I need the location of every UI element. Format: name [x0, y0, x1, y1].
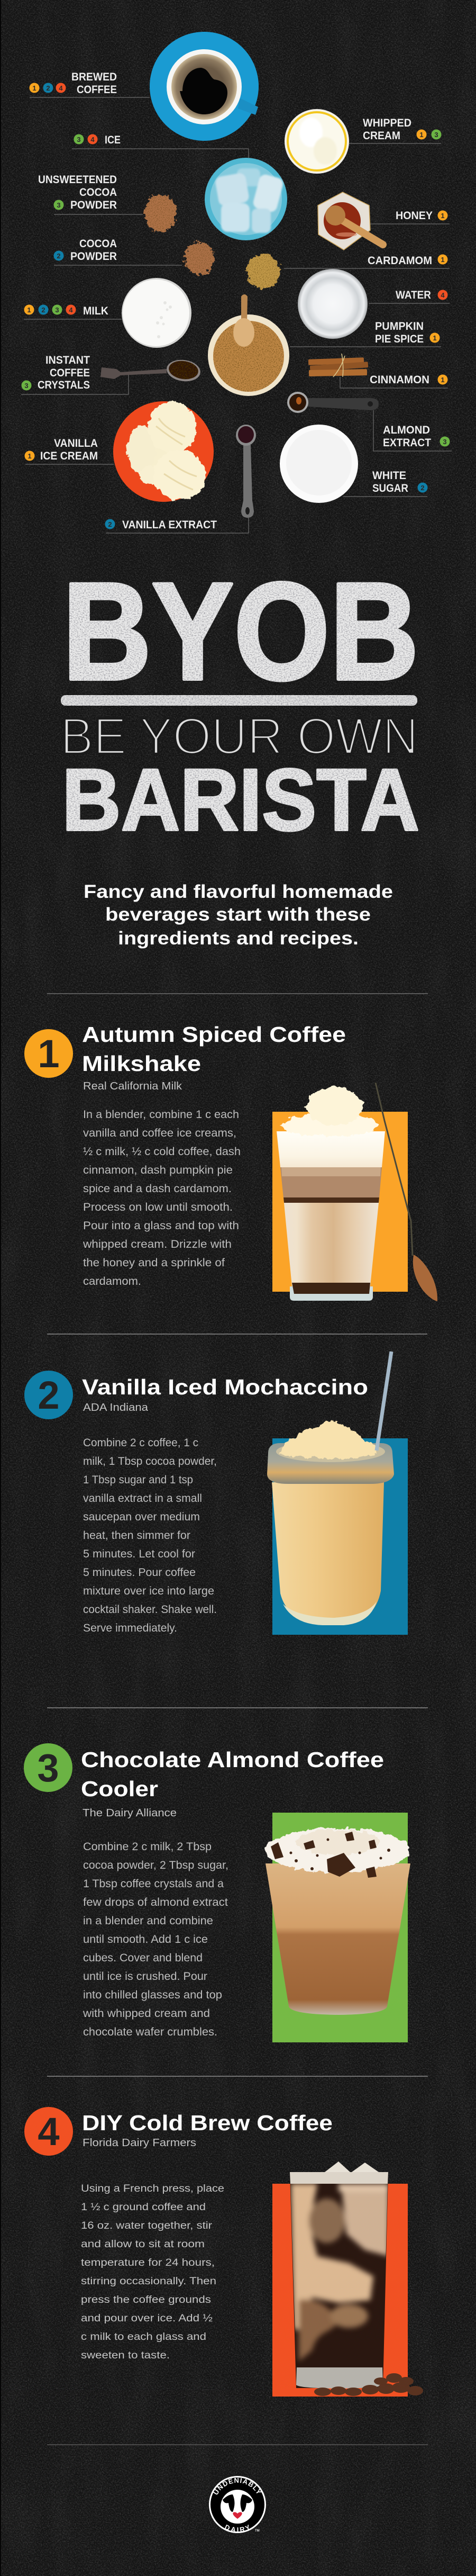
number badge 2: 2	[38, 1373, 60, 1417]
recipe 3 heading	[81, 1748, 384, 1801]
label: milk: 3	[55, 306, 59, 314]
label: water: 4	[441, 291, 445, 299]
ingredient: ice bowl	[205, 158, 287, 240]
label: white sugar	[343, 470, 427, 497]
label: pumpkin pie spice: PIE SPICE	[375, 333, 424, 345]
label: cocoa powder: 2	[57, 252, 61, 260]
recipe 4: DIY Cold Brew Coffee	[24, 2107, 423, 2397]
recipe 2 instructions: vanilla extract in a small	[83, 1492, 202, 1505]
recipe 1 instructions: vanilla and coffee ice creams,	[83, 1127, 236, 1139]
recipe 3 instructions: until smooth. Add 1 c ice	[83, 1933, 208, 1945]
ingredient: water bowl	[298, 269, 368, 339]
label: pumpkin pie spice	[290, 320, 441, 347]
recipe 3 source: The Dairy Alliance	[83, 1807, 177, 1819]
label: cardamom: 1	[441, 256, 445, 264]
recipe 3 instructions: cocoa powder, 2 Tbsp sugar,	[83, 1859, 228, 1871]
recipe 2 photo: mason jar on blue panel with straw	[267, 1352, 408, 1635]
label: cinnamon: CINNAMON	[370, 374, 429, 386]
recipe 4 instructions: stirring occasionally. Then	[81, 2276, 216, 2287]
recipe 3 photo: iced coffee glass on green panel	[266, 1813, 410, 2042]
recipe 4 photo: cold brew glass on red panel with coffee beans	[272, 2161, 423, 2397]
label: cinnamon	[340, 374, 448, 388]
ingredient: whipped cream bowl	[285, 109, 349, 174]
recipe 3 instructions: cubes. Cover and blend	[83, 1952, 203, 1964]
recipe 1 instructions: cinnamon, dash pumpkin pie	[83, 1164, 233, 1176]
recipe 1 instructions: ½ c milk, ½ c cold coffee, dash	[83, 1146, 241, 1158]
label: white sugar: 2	[420, 484, 425, 492]
label: instant coffee crystals: CRYSTALS	[38, 379, 90, 391]
ingredient: honey jar with dipper	[318, 192, 383, 250]
label: vanilla extract	[105, 518, 249, 533]
ingredient: brewed coffee cup	[150, 32, 259, 141]
recipe 1 heading	[82, 1022, 346, 1076]
label: ice: 3	[77, 136, 81, 143]
label: cocoa powder: COCOA	[79, 238, 117, 250]
label: brewed coffee: COFFEE	[77, 84, 117, 96]
logo: Undeniably Dairy: UNDENIABLY	[213, 2478, 261, 2494]
recipe 1: Autumn Spiced Coffee Milkshake	[24, 1022, 437, 1301]
label: brewed coffee: 4	[59, 84, 63, 92]
label: unsweetened cocoa powder: UNSWEETENED	[38, 174, 117, 186]
intro text: ingredients and recipes.	[118, 928, 359, 949]
recipe 1 source: Real California Milk	[83, 1080, 182, 1092]
number badge 4	[24, 2107, 73, 2156]
recipe 2 source: ADA Indiana	[83, 1402, 149, 1413]
recipe 4 instructions	[81, 2183, 224, 2361]
title: BYOB Be Your Own Barista: BYOB	[62, 554, 419, 709]
recipe 3 instructions: into chilled glasses and top	[83, 1989, 222, 2001]
recipe 4 instructions: and pour over ice. Add ½	[81, 2313, 213, 2324]
recipe 3 instructions: with whipped cream and	[83, 2007, 210, 2020]
recipe 3 instructions: 1 Tbsp coffee crystals and a	[83, 1878, 224, 1890]
ingredient: vanilla ice cream plate	[113, 401, 214, 502]
label: almond extract: 3	[443, 438, 447, 446]
label: unsweetened cocoa powder: 3	[57, 201, 61, 209]
ingredient: cinnamon sticks	[308, 354, 368, 377]
label: instant coffee crystals	[21, 354, 129, 394]
label: ice: 4	[90, 136, 95, 143]
recipe 2 instructions: saucepan over medium	[83, 1511, 200, 1523]
label: honey	[370, 210, 450, 224]
label: instant coffee crystals: INSTANT	[45, 354, 90, 366]
recipe 4 source: Florida Dairy Farmers	[83, 2137, 196, 2149]
label: whipped cream: 1	[419, 131, 424, 139]
label: cocoa powder: POWDER	[70, 250, 117, 263]
recipe 1 heading: Autumn Spiced Coffee	[82, 1022, 346, 1047]
recipe 2 heading: Vanilla Iced Mochaccino	[82, 1375, 368, 1399]
recipe 4 instructions: and allow to sit at room	[81, 2239, 205, 2250]
recipe 1 instructions: Pour into a glass and top with	[83, 1220, 239, 1232]
number badge 1: 1	[38, 1032, 60, 1076]
label: milk: 1	[27, 306, 31, 314]
recipe 3 instructions: Combine 2 c milk, 2 Tbsp	[83, 1841, 212, 1853]
label: whipped cream	[349, 117, 441, 143]
recipe 2 instructions: Serve immediately.	[83, 1622, 177, 1634]
recipe 1 instructions: whipped cream. Drizzle with	[83, 1238, 232, 1250]
label: whipped cream: 3	[434, 131, 438, 139]
label: pumpkin pie spice: PUMPKIN	[375, 320, 424, 332]
intro text: beverages start with these	[105, 904, 371, 925]
ingredient: cocoa powder pile	[185, 242, 214, 275]
number badge 3: 3	[37, 1746, 59, 1790]
recipe 3: Chocolate Almond Coffee Cooler	[24, 1743, 410, 2042]
label: vanilla ice cream: 1	[28, 452, 32, 460]
label: pumpkin pie spice: 1	[433, 334, 437, 342]
recipe 3 heading: Chocolate Almond Coffee	[81, 1748, 384, 1772]
title: BYOB Be Your Own Barista: BARISTA	[62, 751, 419, 849]
label: almond extract: EXTRACT	[383, 437, 431, 449]
ingredient: instant coffee crystals spoon	[100, 358, 202, 383]
recipe 1 instructions: Process on low until smooth.	[83, 1201, 233, 1213]
recipe 4 instructions: 16 oz. water together, stir	[81, 2220, 213, 2231]
recipe 3 instructions: chocolate wafer crumbles.	[83, 2026, 217, 2038]
recipe 2 instructions: cocktail shaker. Shake well.	[83, 1604, 217, 1616]
label: cardamom: CARDAMOM	[368, 255, 432, 267]
label: milk: MILK	[83, 305, 108, 317]
intro text	[84, 881, 393, 949]
label: white sugar: SUGAR	[372, 482, 408, 494]
label: honey: HONEY	[396, 210, 433, 222]
ingredient: almond extract spoon	[287, 392, 379, 413]
label: cinnamon: 1	[441, 376, 445, 384]
recipe 4 instructions: Using a French press, place	[81, 2183, 224, 2194]
recipe 3 instructions: few drops of almond extract	[83, 1896, 228, 1908]
label: brewed coffee	[30, 71, 150, 97]
label: brewed coffee: 2	[46, 84, 50, 92]
label: honey: 1	[441, 212, 445, 220]
recipe 1 instructions: spice and a dash cardamom.	[83, 1183, 232, 1195]
label: whipped cream: CREAM	[363, 130, 400, 142]
label: brewed coffee: 1	[32, 84, 36, 92]
title: BYOB Be Your Own Barista	[60, 554, 419, 849]
logo: Undeniably Dairy	[209, 2476, 266, 2533]
recipe 2 instructions: 5 minutes. Pour coffee	[83, 1566, 196, 1579]
recipe 3 instructions	[83, 1841, 228, 2038]
logo: Undeniably Dairy: TM	[255, 2529, 260, 2533]
number badge 3	[24, 1743, 72, 1792]
recipe 1 photo: milkshake glass on orange panel with spoon	[272, 1083, 437, 1301]
ingredient: white sugar plate	[280, 425, 358, 503]
label: cardamom	[284, 254, 450, 268]
recipe 4 instructions: press the coffee grounds	[81, 2294, 211, 2305]
number badge 4: 4	[38, 2110, 60, 2154]
label: vanilla extract: VANILLA EXTRACT	[122, 519, 217, 531]
label: white sugar: WHITE	[372, 470, 406, 482]
recipe 2 instructions: milk, 1 Tbsp cocoa powder,	[83, 1455, 217, 1467]
intro text: Fancy and flavorful homemade	[84, 881, 393, 902]
label: milk: 2	[41, 306, 45, 314]
recipe 1 instructions: cardamom.	[83, 1275, 141, 1287]
label: milk	[24, 305, 122, 319]
label: vanilla extract: 2	[108, 520, 112, 528]
ingredient: milk bowl	[122, 278, 191, 348]
recipe 2 instructions: 5 minutes. Let cool for	[83, 1548, 195, 1560]
label: water: WATER	[396, 289, 431, 301]
recipe 3 heading: Cooler	[81, 1777, 158, 1801]
label: vanilla ice cream: VANILLA	[54, 437, 98, 449]
recipe 2 instructions: Combine 2 c coffee, 1 c	[83, 1437, 198, 1449]
recipe 3 instructions: in a blender and combine	[83, 1915, 213, 1927]
label: instant coffee crystals: COFFEE	[50, 367, 90, 379]
label: vanilla ice cream	[24, 437, 114, 464]
recipe 1 instructions: the honey and a sprinkle of	[83, 1257, 225, 1269]
label: unsweetened cocoa powder: POWDER	[70, 199, 117, 211]
label: whipped cream: WHIPPED	[363, 117, 411, 129]
recipe 1 instructions	[83, 1109, 241, 1287]
title: BYOB Be Your Own Barista: BE YOUR OWN	[60, 707, 418, 765]
number badge 1	[24, 1029, 73, 1078]
label: unsweetened cocoa powder	[38, 174, 143, 214]
recipe 2 instructions: mixture over ice into large	[83, 1585, 214, 1597]
label: ice	[72, 134, 249, 158]
recipe 2 instructions: heat, then simmer for	[83, 1529, 190, 1542]
label: instant coffee crystals: 3	[24, 382, 29, 390]
ingredient: vanilla extract spoon	[236, 425, 256, 518]
label: almond extract: ALMOND	[383, 424, 430, 436]
recipe 4 instructions: temperature for 24 hours,	[81, 2257, 215, 2268]
recipe 1 instructions: In a blender, combine 1 c each	[83, 1109, 239, 1121]
recipe 2: Vanilla Iced Mochaccino	[24, 1352, 408, 1635]
label: brewed coffee: BREWED	[71, 71, 117, 83]
recipe 4 instructions: c milk to each glass and	[81, 2331, 206, 2343]
label: almond extract	[373, 410, 452, 451]
recipe 2 instructions: 1 Tbsp sugar and 1 tsp	[83, 1474, 193, 1486]
recipe 4 instructions: sweeten to taste.	[81, 2350, 170, 2361]
number badge 2	[24, 1371, 73, 1419]
ingredient: cardamom pile	[246, 255, 280, 289]
recipe 3 instructions: until ice is crushed. Pour	[83, 1970, 207, 1983]
recipe 4 instructions: 1 ½ c ground coffee and	[81, 2202, 206, 2213]
recipe 1 heading: Milkshake	[82, 1051, 201, 1076]
label: milk: 4	[69, 306, 73, 314]
logo: Undeniably Dairy: DAIRY	[225, 2524, 249, 2532]
label: ice: ICE	[105, 134, 121, 146]
label: unsweetened cocoa powder: COCOA	[79, 186, 117, 199]
ingredient: brown sugar bowl with scoop	[208, 294, 289, 396]
recipe 2 instructions	[83, 1437, 217, 1634]
label: cocoa powder	[54, 238, 182, 265]
ingredient: unsweetened cocoa powder pile	[144, 194, 176, 232]
label: vanilla ice cream: ICE CREAM	[40, 450, 98, 462]
label: water	[369, 289, 450, 303]
recipe 4 heading: DIY Cold Brew Coffee	[82, 2111, 333, 2135]
